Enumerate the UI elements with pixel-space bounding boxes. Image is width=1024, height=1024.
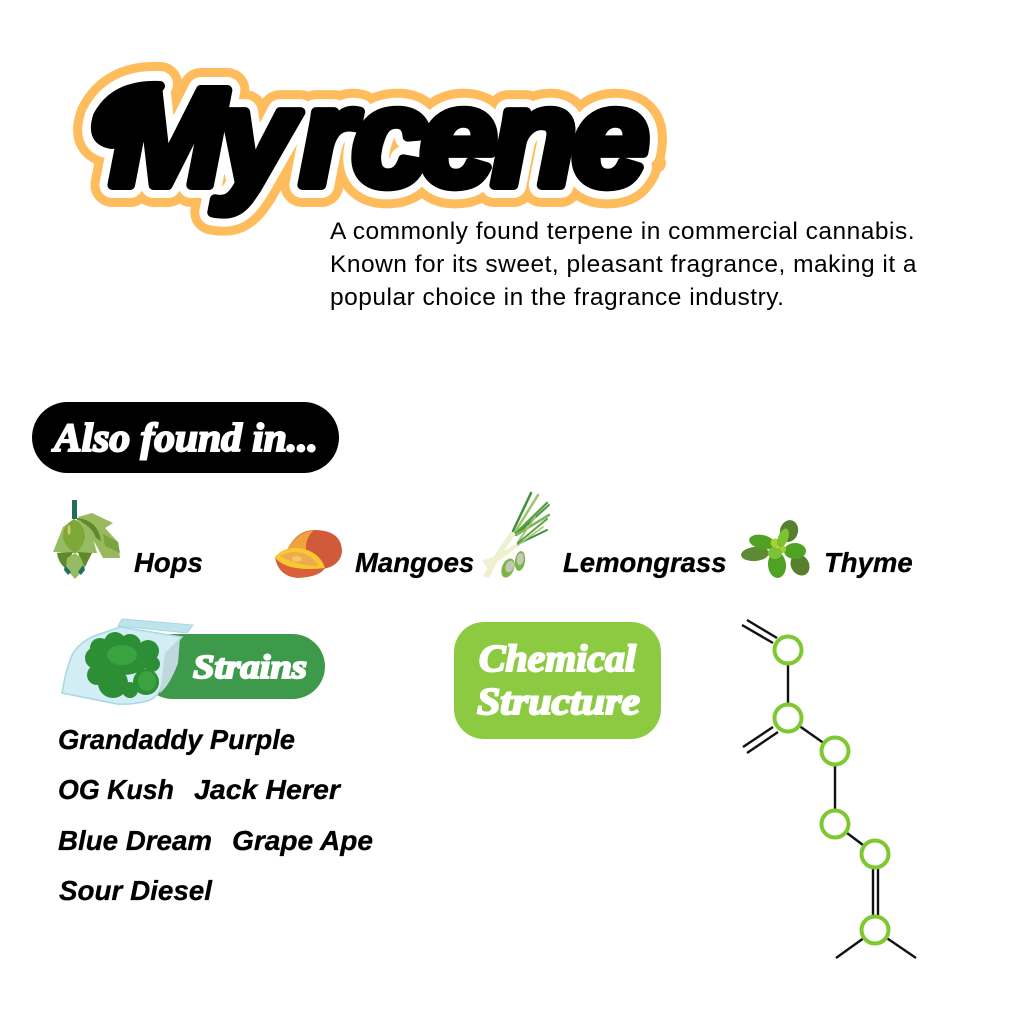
heading: chemical structure: Structure (477, 681, 640, 723)
title: Myrcene (110, 61, 649, 215)
icon: lemongrass (482, 493, 549, 580)
strains list: Jack Herer (194, 774, 341, 805)
icon: mango (275, 530, 342, 578)
label: thyme: Thyme (824, 547, 913, 578)
icon: hops (53, 500, 120, 579)
strains list: OG Kush (58, 774, 174, 805)
icon: thyme (740, 518, 813, 579)
intro text: A commonly found terpene in commercial cannabis. (330, 218, 915, 245)
heading: strains (140, 634, 325, 699)
strains list: Sour Diesel (59, 875, 213, 906)
label: mangoes: Mangoes (355, 547, 474, 578)
label: lemongrass: Lemongrass (563, 547, 727, 578)
heading: also found in: Also found in... (51, 415, 318, 460)
strains list (58, 724, 373, 906)
intro text: Known for its sweet, pleasant fragrance, making it a (330, 251, 917, 278)
intro text (330, 218, 917, 311)
heading: chemical structure (454, 622, 661, 739)
title: Myrcene (110, 61, 649, 215)
intro text: popular choice in the fragrance industry. (330, 284, 784, 311)
chart: molecular structure (742, 620, 916, 958)
heading: chemical structure: Chemical (479, 638, 636, 680)
title: Myrcene (110, 61, 649, 215)
strains list: Blue Dream (58, 825, 212, 856)
heading: strains: Strains (193, 649, 307, 686)
strains list: Grape Ape (232, 825, 373, 856)
icon: bag of cannabis (62, 619, 193, 704)
strains list: Grandaddy Purple (58, 724, 295, 755)
heading: also found in (32, 402, 339, 473)
label: hops: Hops (134, 547, 203, 578)
